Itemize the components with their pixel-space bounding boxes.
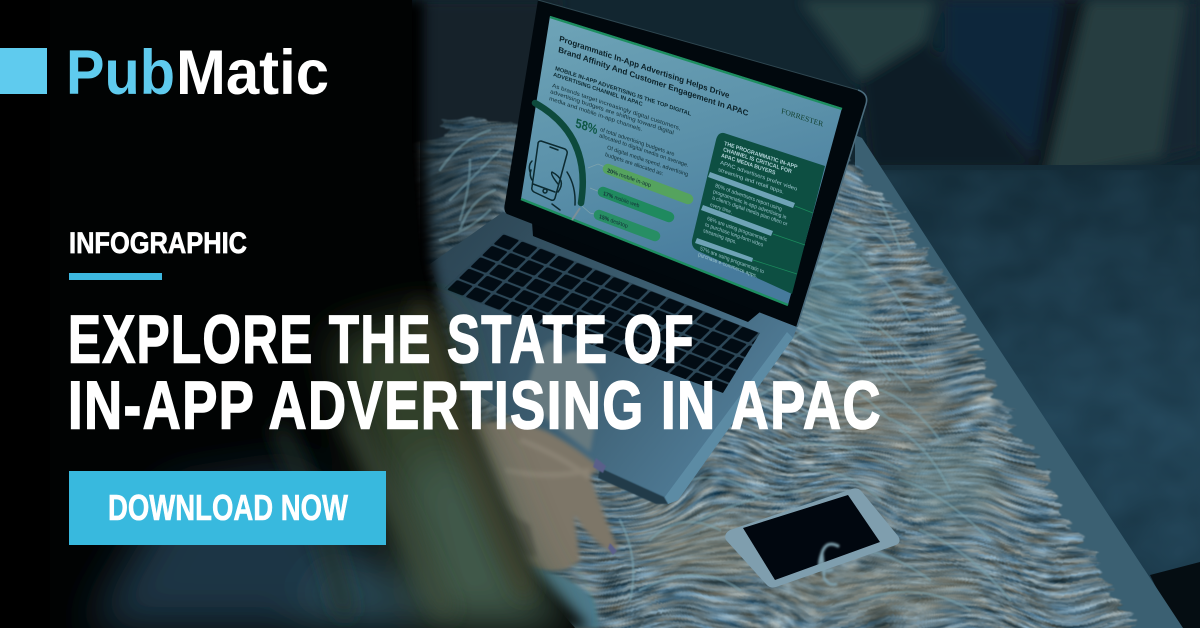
screen left column text: As brands target increasingly digital customers, xyxy=(552,83,681,132)
screen green rules xyxy=(521,17,842,305)
headline xyxy=(68,302,882,444)
button: download now: DOWNLOAD NOW xyxy=(108,487,348,528)
screen xyxy=(521,16,842,305)
fur highlights xyxy=(440,130,1010,610)
screen left column text: media and mobile in-app channels. xyxy=(549,96,643,133)
screen title: Programmatic In-App Advertising Helps Drive xyxy=(559,34,731,100)
keyboard xyxy=(443,233,760,393)
screen green panel: purchase e-commerce apps. xyxy=(698,252,758,280)
screen left column text: advertising budgets are shifting toward digital xyxy=(550,89,674,137)
screen green panel: APAC MEDIA BUYERS xyxy=(721,153,776,177)
screen arc xyxy=(535,103,583,203)
screen green panel: 57% are using programmatic to xyxy=(700,246,764,275)
bar: desktop xyxy=(599,214,655,236)
bar: mobile web xyxy=(603,191,669,217)
headline: IN-APP ADVERTISING IN APAC xyxy=(68,368,882,444)
laptop base xyxy=(430,212,797,504)
screen green panel: to purchase long-form video xyxy=(705,222,764,249)
screen connector lines xyxy=(582,164,607,215)
screen left column text: allocated to digital media on average. xyxy=(599,133,689,169)
accent bar xyxy=(69,273,162,280)
fingernails xyxy=(593,458,617,555)
screen green panel: streaming apps. xyxy=(703,228,737,246)
screen left column text: MOBILE IN-APP ADVERTISING IS THE TOP DIGITAL xyxy=(555,66,692,118)
screen green panel xyxy=(692,133,825,294)
woman's hair xyxy=(0,0,590,628)
screen green panel: 80% of advertisers report using xyxy=(715,183,782,213)
Forrester logo: FORRESTER xyxy=(781,106,824,129)
logo wordmark xyxy=(66,38,329,108)
eyebrow: INFOGRAPHIC: INFOGRAPHIC xyxy=(69,227,247,260)
screen left column text: ADVERTISING CHANNEL IN APAC xyxy=(553,72,643,108)
lower hand xyxy=(462,421,618,571)
headline: EXPLORE THE STATE OF xyxy=(68,302,695,378)
bar: mobile in-app: 20% mobile in-app xyxy=(607,168,651,189)
logo wordmark: Pub xyxy=(66,38,175,108)
sofa seat xyxy=(860,165,1200,628)
smartphone on rug xyxy=(725,488,900,588)
icon: hand holding phone xyxy=(529,141,575,210)
screen left column text xyxy=(549,66,692,178)
laptop lid xyxy=(504,0,867,327)
screen title: Brand Affinity And Customer Engagement In APAC xyxy=(558,45,749,118)
screen left column text: 58% xyxy=(575,115,599,137)
dark blanket corner xyxy=(1150,562,1200,628)
screen green panel: programmatic in-app advertising in xyxy=(713,189,787,221)
sofa arm xyxy=(855,135,1183,628)
screen green panel: 68% are using programmatic xyxy=(707,216,768,243)
hinge xyxy=(532,222,760,322)
fur rug xyxy=(416,116,1138,628)
bar: mobile in-app xyxy=(607,168,688,199)
woman's hands xyxy=(462,341,618,571)
laptop xyxy=(430,0,867,504)
screen green panel: THE PROGRAMMATIC IN-APP xyxy=(724,141,798,171)
screen left column text: Of digital media spend, advertising xyxy=(607,145,688,178)
bar: mobile web: 17% mobile web xyxy=(603,191,640,210)
upper hand xyxy=(525,341,598,452)
screen green panel: streaming and retail apps. xyxy=(718,167,785,196)
screen green panel: a client's digital media plan often or xyxy=(712,195,788,228)
screen left column text: budgets are allocated as: xyxy=(605,152,664,178)
screen green panel: CHANNEL IS CRITICAL FOR xyxy=(723,147,792,175)
screen green panel: every time. xyxy=(710,202,733,216)
photo background: room and sofa xyxy=(412,0,1200,628)
infographic on screen xyxy=(521,17,842,305)
screen left column text: of total advertising budgets are xyxy=(600,127,675,158)
logo: PubMatic xyxy=(0,38,329,108)
logo square xyxy=(0,48,47,94)
bar: desktop: 15% desktop xyxy=(599,214,628,230)
fur shading near hair xyxy=(420,116,620,627)
logo wordmark: Matic xyxy=(176,38,329,108)
button: download now xyxy=(69,471,386,545)
woman's sleeve xyxy=(530,567,600,628)
screen green panel: APAC advertisers prefer video xyxy=(720,160,798,193)
